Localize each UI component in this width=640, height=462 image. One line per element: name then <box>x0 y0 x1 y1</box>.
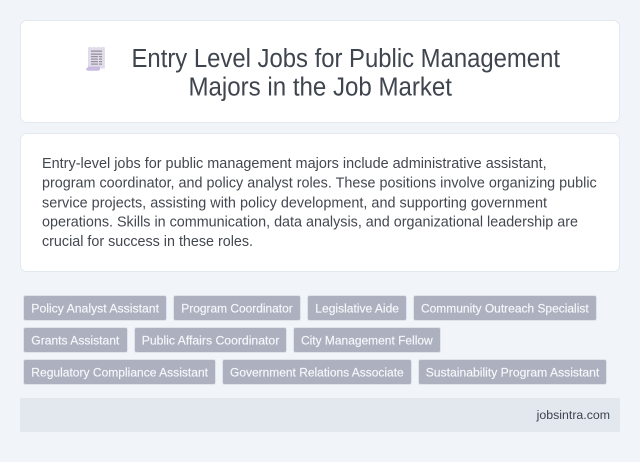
tag: City Management Fellow: City Management Fellow <box>301 334 433 348</box>
icon: document scroll <box>86 47 105 71</box>
description text: operations. Skills in communication, data analysis, and organizational leadership are <box>42 215 578 231</box>
tag: Community Outreach Specialist <box>414 296 596 320</box>
panel: description card <box>20 134 620 272</box>
tag: Policy Analyst Assistant <box>24 296 166 320</box>
description text: service projects, assisting with policy development, and supporting government <box>42 195 547 211</box>
tag: Program Coordinator: Program Coordinator <box>181 302 293 316</box>
description text: Entry-level jobs for public management majors include administrative assistant, <box>42 156 547 172</box>
tag: Legislative Aide <box>308 296 406 320</box>
tag: Community Outreach Specialist: Community Outreach Specialist <box>421 302 589 316</box>
tag: Regulatory Compliance Assistant <box>24 360 216 384</box>
title: Majors in the Job Market <box>188 74 452 102</box>
tag: Grants Assistant: Grants Assistant <box>31 334 120 348</box>
tag: Sustainability Program Assistant: Sustainability Program Assistant <box>426 366 600 380</box>
tag: Government Relations Associate: Government Relations Associate <box>230 366 404 380</box>
tag: Policy Analyst Assistant: Policy Analyst Assistant <box>31 302 160 316</box>
tag: Program Coordinator <box>174 296 300 320</box>
tag: Public Affairs Coordinator: Public Affairs Coordinator <box>142 334 279 348</box>
description text: program coordinator, and policy analyst roles. These positions involve organizing public <box>42 176 597 192</box>
footer bar <box>20 398 620 432</box>
tag: Regulatory Compliance Assistant: Regulatory Compliance Assistant <box>31 366 209 380</box>
tag: Public Affairs Coordinator <box>134 328 286 352</box>
panel: header card <box>20 20 620 122</box>
title: Entry Level Jobs for Public Management <box>132 45 560 73</box>
tag: Government Relations Associate <box>222 360 412 384</box>
tag: Grants Assistant <box>24 328 128 352</box>
footer source text: jobsintra.com <box>536 408 610 422</box>
panel: job tags <box>24 296 606 384</box>
tag: Sustainability Program Assistant <box>418 360 606 384</box>
description text: crucial for success in these roles. <box>42 234 253 250</box>
tag: City Management Fellow <box>294 328 440 352</box>
tag: Legislative Aide: Legislative Aide <box>315 302 399 316</box>
